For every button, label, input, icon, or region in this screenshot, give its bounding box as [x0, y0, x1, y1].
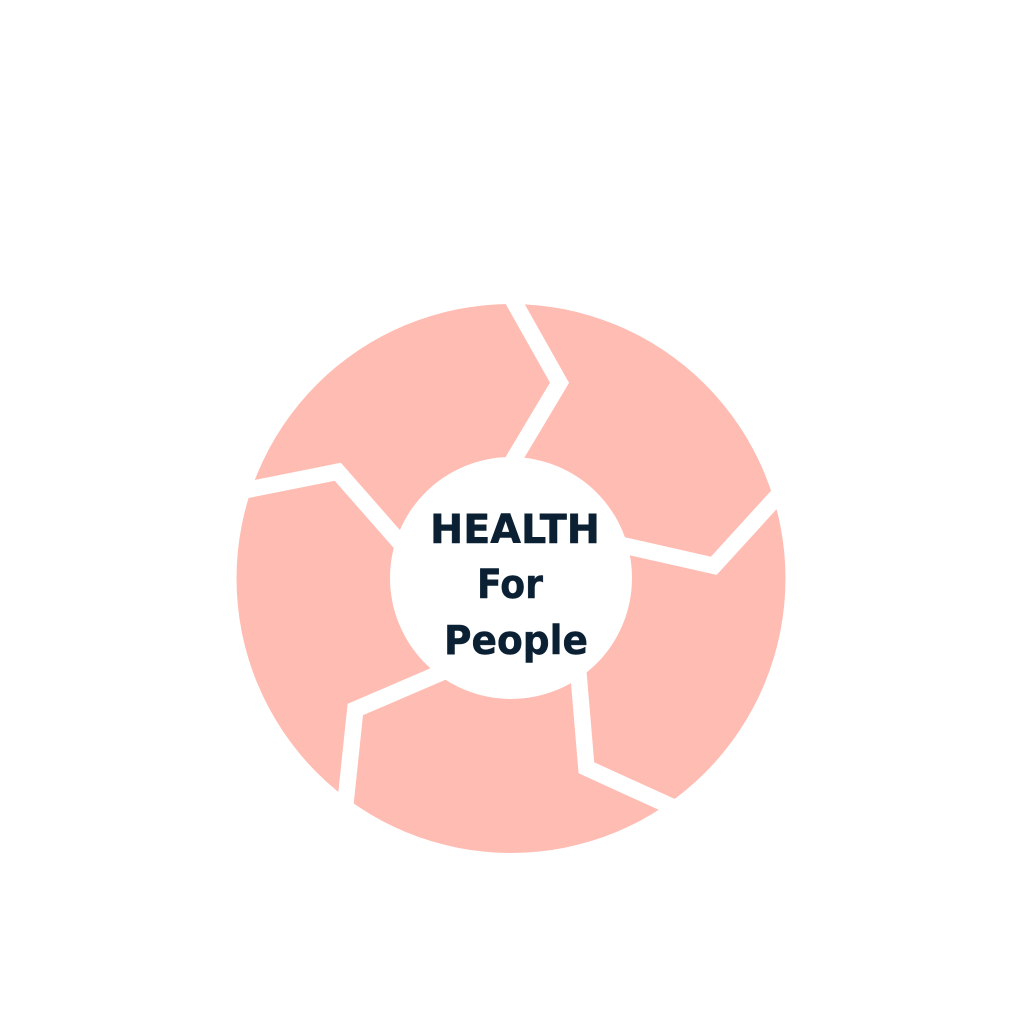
- center title: For: [477, 562, 543, 608]
- center title: [430, 507, 600, 664]
- center white circle: [390, 457, 632, 699]
- center title: People: [444, 618, 588, 664]
- center title: HEALTH: [430, 507, 600, 553]
- pink wheel disc: [236, 304, 786, 853]
- segment dividers: [232, 290, 792, 817]
